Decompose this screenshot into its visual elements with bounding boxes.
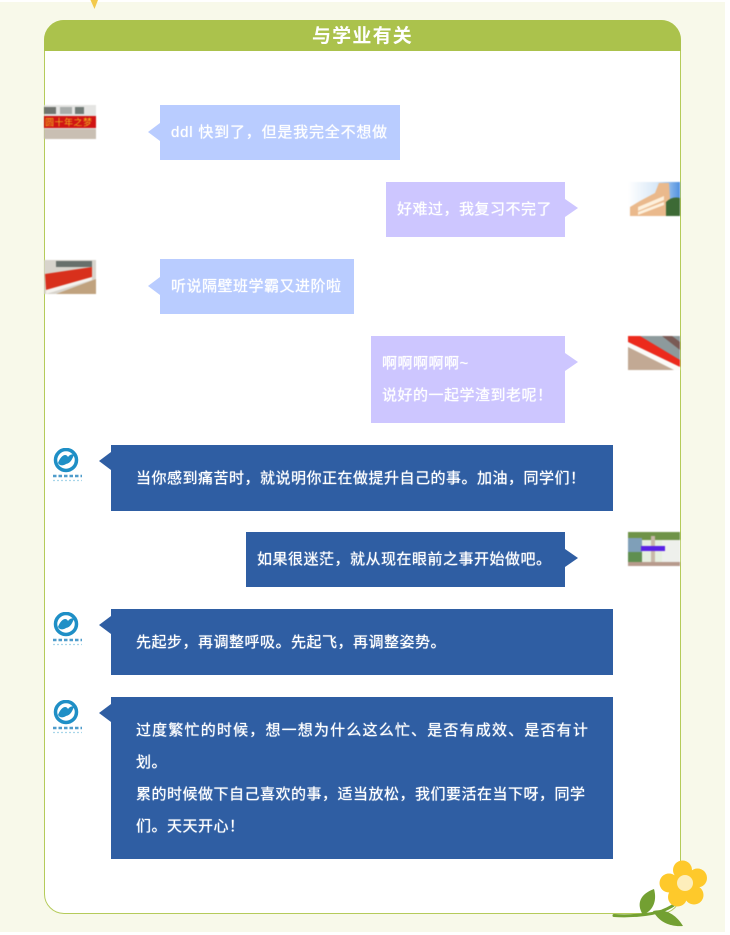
message bubble 5: 当你感到痛苦时，就说明你正在做提升自己的事。加油，同学们！ xyxy=(136,470,586,487)
heading: 与学业有关 xyxy=(312,26,413,47)
message bubble 8 xyxy=(111,697,613,859)
avatar photo: banner on wall xyxy=(44,259,97,295)
heading xyxy=(44,20,681,51)
avatar photo: red banner building xyxy=(43,104,97,140)
message bubble 1 xyxy=(160,105,400,160)
school logo 1 xyxy=(53,448,82,482)
message bubble 7: 先起步，再调整呼吸。先起飞，再调整姿势。 xyxy=(136,634,446,651)
message bubble 6 xyxy=(246,532,565,587)
message bubble 7 xyxy=(111,609,613,675)
decorative yellow pin at top xyxy=(90,0,98,9)
school logo 3 xyxy=(53,700,82,734)
message bubble 2 xyxy=(386,182,565,237)
message bubble 8: 们。天天开心！ xyxy=(136,818,245,835)
icon: yellow flower with leaves xyxy=(612,860,707,926)
message bubble 2: 好难过，我复习不完了 xyxy=(397,201,552,218)
message bubble 6: 如果很迷茫，就从现在眼前之事开始做吧。 xyxy=(257,551,552,568)
avatar photo: diagonal red banner xyxy=(627,335,681,371)
message bubble 4: 说好的一起学渣到老呢！ xyxy=(382,387,553,404)
message bubble 8: 过度繁忙的时候，想一想为什么这么忙、是否有成效、是否有计 xyxy=(136,722,589,739)
message bubble 8: 划。 xyxy=(136,754,167,771)
avatar photo: campus building xyxy=(629,181,681,217)
avatar photo: red banner building: 圆十年之梦 xyxy=(45,116,93,128)
message bubble 8: 累的时候做下自己喜欢的事，适当放松，我们要活在当下呀，同学 xyxy=(136,786,586,803)
message bubble 3: 听说隔壁班学霸又进阶啦 xyxy=(171,278,342,295)
message bubble 1: ddl 快到了，但是我完全不想做 xyxy=(171,124,388,141)
message bubble 3 xyxy=(160,259,354,314)
avatar photo: campus sign xyxy=(627,531,681,567)
message bubble 4: 啊啊啊啊啊~ xyxy=(382,355,469,372)
message bubble 4 xyxy=(371,336,565,423)
school logo 2 xyxy=(53,612,82,646)
message bubble 5 xyxy=(111,445,613,511)
